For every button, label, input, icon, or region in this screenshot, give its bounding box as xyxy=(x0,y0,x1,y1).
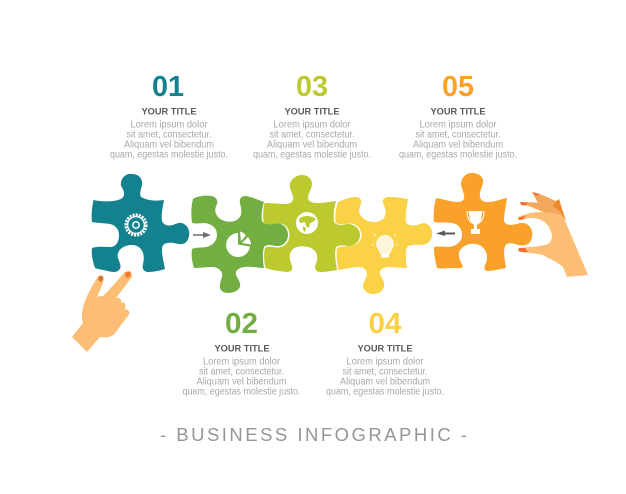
block 04: sit amet, consectetur. xyxy=(342,366,428,377)
arrow left xyxy=(436,230,455,236)
finger shade xyxy=(553,199,566,221)
block 02: 02 xyxy=(225,308,258,340)
block 05: Lorem ipsum dolor xyxy=(420,119,497,130)
block 05: Aliquam vel bibendum xyxy=(413,139,503,150)
icon: pie chart xyxy=(226,232,251,257)
block 02: Lorem ipsum dolor xyxy=(203,356,281,367)
block 03: 03 xyxy=(296,71,328,103)
block 01: 01 xyxy=(152,71,184,103)
block 04: quam, egestas molestie justo. xyxy=(326,386,444,397)
block 01: Lorem ipsum dolor xyxy=(130,119,208,130)
block 02: YOUR TITLE xyxy=(214,344,270,354)
arrow right xyxy=(193,232,211,238)
block 02 xyxy=(182,308,300,397)
puzzle piece 3 lime xyxy=(263,175,360,272)
block 01: YOUR TITLE xyxy=(142,106,196,118)
block 05: quam, egestas molestie justo. xyxy=(399,149,517,160)
block 02: Aliquam vel bibendum xyxy=(196,376,286,387)
block 04: YOUR TITLE xyxy=(358,344,412,354)
nail: index xyxy=(125,271,131,278)
icon: trophy xyxy=(467,211,484,234)
puzzle piece 5 orange xyxy=(434,173,532,271)
block 01: sit amet, consectetur. xyxy=(126,129,212,140)
back fingers xyxy=(520,192,565,220)
block 04: Lorem ipsum dolor xyxy=(346,356,424,367)
footer title: - BUSINESS INFOGRAPHIC - xyxy=(160,424,467,445)
nail: middle xyxy=(98,276,103,282)
palm and thumb xyxy=(518,212,588,277)
icon: globe xyxy=(296,212,318,234)
block 02: quam, egestas molestie justo. xyxy=(182,386,300,397)
puzzle piece 2 green xyxy=(191,196,288,293)
block 03: Lorem ipsum dolor xyxy=(274,119,351,130)
icon: gear xyxy=(126,215,146,235)
block 05 xyxy=(399,71,517,160)
puzzle piece 1 teal xyxy=(92,174,189,272)
block 02: sit amet, consectetur. xyxy=(199,366,284,377)
block 03: sit amet, consectetur. xyxy=(270,129,354,140)
puzzle piece 4 yellow xyxy=(335,197,432,294)
block 01: quam, egestas molestie justo. xyxy=(110,149,228,160)
block 03: quam, egestas molestie justo. xyxy=(253,149,371,160)
block 04: 04 xyxy=(368,308,402,340)
block 03: YOUR TITLE xyxy=(284,106,340,118)
block 03 xyxy=(253,71,371,160)
icon: light bulb xyxy=(372,234,398,258)
block 01: Aliquam vel bibendum xyxy=(124,139,214,150)
block 01 xyxy=(110,71,228,160)
right hand pinching xyxy=(518,192,588,277)
nails xyxy=(518,192,540,252)
block 05: YOUR TITLE xyxy=(430,106,486,118)
block 05: sit amet, consectetur. xyxy=(416,129,500,140)
block 05: 05 xyxy=(442,71,474,103)
block 03: Aliquam vel bibendum xyxy=(267,139,357,150)
left hand pointing xyxy=(72,271,132,352)
block 04 xyxy=(326,308,444,397)
block 04: Aliquam vel bibendum xyxy=(340,376,430,387)
